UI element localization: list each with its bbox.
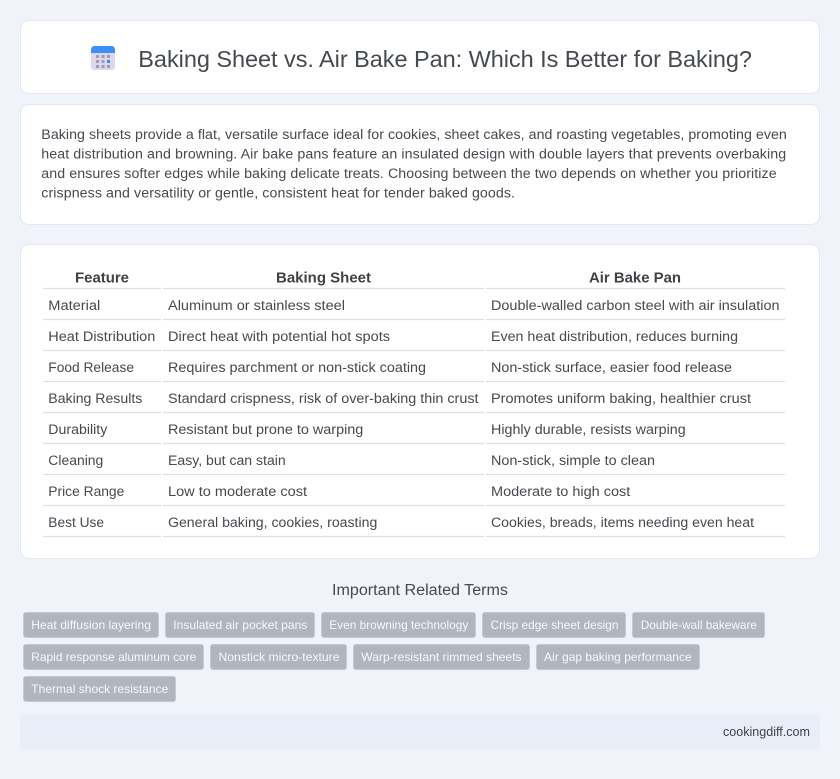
panel: introduction text: and ensures softer edges while baking delicate treats. Choosing between the two depends on whether you prioritize [41,166,777,182]
tag: Air gap baking performance [544,650,692,664]
row: heat distribution: Heat Distribution [48,329,155,345]
tag [210,644,346,670]
panel: comparison table [20,244,820,558]
row: baking results: Promotes uniform baking, healthier crust [491,391,751,407]
row: best use [48,515,754,531]
row: heat distribution [48,329,738,345]
tag [632,612,764,638]
row: cleaning: Cleaning [48,453,103,469]
row: baking results [48,391,751,407]
row: durability: Durability [48,422,108,438]
row: material: Double-walled carbon steel with air insulation [491,298,780,314]
panel: introduction text [20,104,820,224]
row: heat distribution: Direct heat with potential hot spots [168,329,390,345]
row: durability [48,422,686,438]
row: price range: Moderate to high cost [491,484,630,500]
row: best use: Cookies, breads, items needing even heat [491,515,754,531]
row: best use: General baking, cookies, roasting [168,515,377,531]
row: material: Material [48,298,100,314]
tag [482,612,626,638]
table header row: Baking Sheet [276,270,371,286]
tag [24,676,176,702]
row: food release [48,360,732,376]
row: cleaning: Non-stick, simple to clean [491,453,655,469]
row: baking results: Standard crispness, risk of over-baking thin crust [168,391,479,407]
related term tags [24,612,764,702]
row: material: Aluminum or stainless steel [168,298,345,314]
footer: cookingdiff.com [723,725,810,739]
row: durability: Highly durable, resists warping [491,422,686,438]
panel: introduction text: Baking sheets provide a flat, versatile surface ideal for cookies, sheet cakes, and roasting vegetables, promoting even [41,127,787,143]
panel: introduction text: crispness and versatility or gentle, consistent heat for tender baked goods. [41,185,515,201]
tag [24,612,158,638]
tag: Thermal shock resistance [31,682,169,696]
footer [20,715,820,749]
row: price range: Price Range [48,484,124,500]
tag [536,644,700,670]
row: baking results: Baking Results [48,391,142,407]
table header row [75,270,681,286]
tag [322,612,476,638]
row: price range [48,484,630,500]
row: heat distribution: Even heat distribution, reduces burning [491,329,738,345]
row: food release: Food Release [48,360,134,376]
table header row: Air Bake Pan [589,270,681,286]
tag: Rapid response aluminum core [31,650,197,664]
tag: Insulated air pocket pans [173,618,307,632]
row: cleaning: Easy, but can stain [168,453,286,469]
tag [166,612,314,638]
tag: Nonstick micro-texture [218,650,340,664]
row: cleaning [48,453,655,469]
tag: Crisp edge sheet design [490,618,618,632]
header panel [20,20,820,94]
title: Baking Sheet vs. Air Bake Pan: Which Is Better for Baking? [138,46,752,72]
icon: baking calendar [91,46,115,70]
row: price range: Low to moderate cost [168,484,307,500]
row: best use: Best Use [48,515,104,531]
tag [24,644,204,670]
row: food release: Non-stick surface, easier food release [491,360,732,376]
row: material [48,298,780,314]
tag: Double-wall bakeware [641,618,757,632]
row: durability: Resistant but prone to warping [168,422,363,438]
related terms heading: Important Related Terms [332,582,508,599]
tag: Heat diffusion layering [31,618,151,632]
tag: Warp-resistant rimmed sheets [361,650,522,664]
tag [354,644,530,670]
table header row: Feature [75,270,129,286]
panel: introduction text: heat distribution and browning. Air bake pans feature an insulated design with double layers that prevents overbaking [41,146,786,162]
tag: Even browning technology [329,618,468,632]
row: food release: Requires parchment or non-stick coating [168,360,426,376]
